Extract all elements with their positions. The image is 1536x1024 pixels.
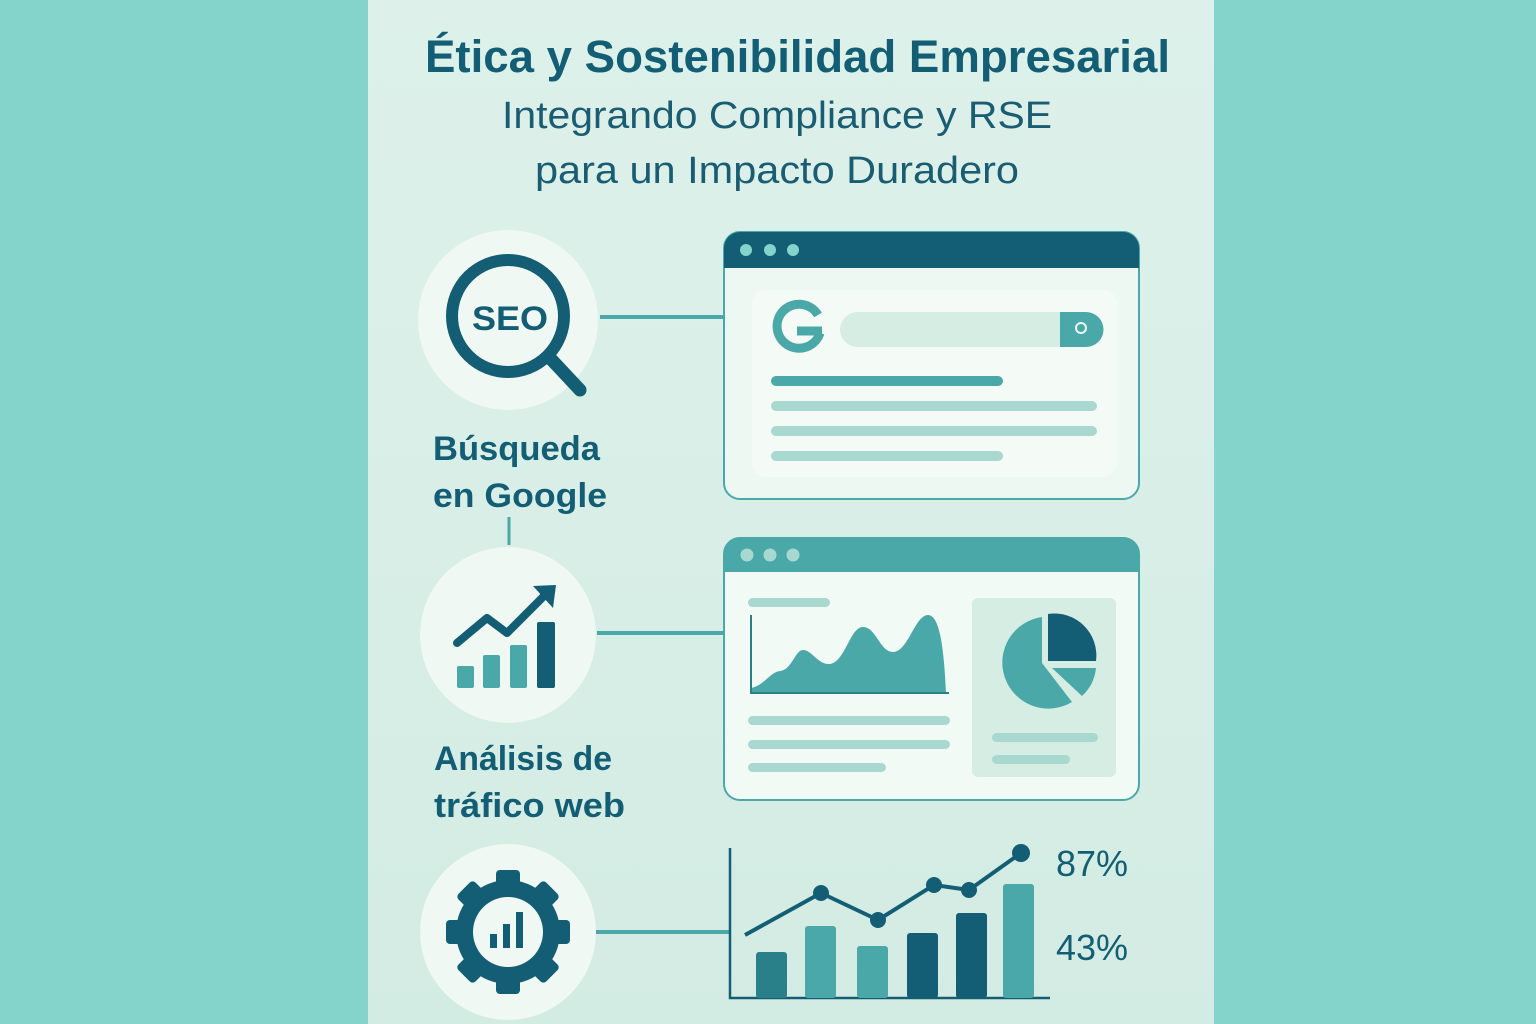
label: Análisis de tráfico web <box>434 740 625 825</box>
panel: central background <box>368 0 1214 1024</box>
subtitle: para un Impacto Duradero <box>535 150 1019 192</box>
icon: SEO magnifier: SEO <box>472 300 548 338</box>
area chart <box>751 615 946 693</box>
label: Búsqueda en Google <box>433 430 607 515</box>
label: Análisis de tráfico web: tráfico web <box>434 787 625 825</box>
icon: SEO magnifier <box>418 230 598 410</box>
bar and line chart <box>730 844 1050 998</box>
connector: SEO to browser <box>600 315 724 319</box>
connector: analytics <box>597 631 724 635</box>
connector: stats <box>596 930 730 934</box>
label: Búsqueda en Google: en Google <box>433 477 607 515</box>
browser: google search <box>724 232 1139 499</box>
icon: growth chart <box>420 547 596 723</box>
subtitle <box>502 95 1052 192</box>
subtitle: Integrando Compliance y RSE <box>502 95 1052 137</box>
label: Búsqueda en Google: Búsqueda <box>433 430 601 468</box>
pie chart <box>1002 617 1072 709</box>
stat: 43%: 43% <box>1056 927 1128 968</box>
icon: gear with bars <box>420 844 596 1020</box>
connector: vertical <box>508 517 510 545</box>
icon: G logo <box>777 304 822 348</box>
browser: analytics dashboard <box>724 538 1139 800</box>
stat: 87%: 87% <box>1056 843 1128 884</box>
label: Análisis de tráfico web: Análisis de <box>434 740 612 778</box>
title: Ética y Sostenibilidad Empresarial <box>425 31 1170 82</box>
